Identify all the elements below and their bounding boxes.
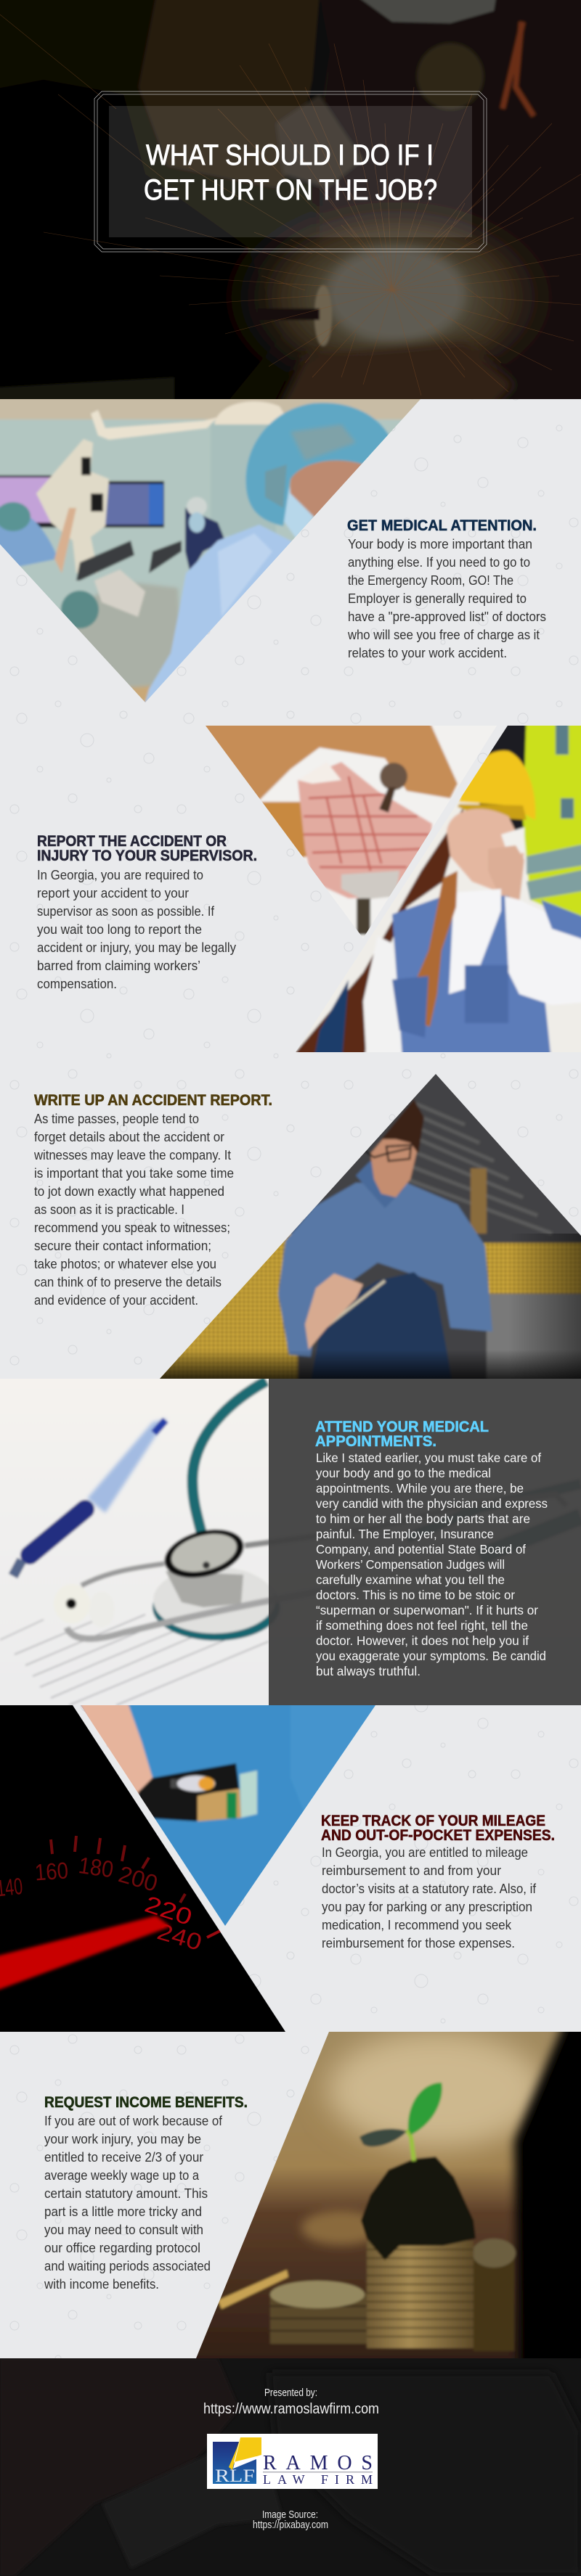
heading (315, 1419, 489, 1450)
photo: bandaged hand with nail (206, 726, 497, 936)
body text (316, 1451, 548, 1678)
presented by (203, 2387, 379, 2417)
body text: doctor’s visits at a statutory rate. Also, if (322, 1882, 537, 1896)
body text (33, 1112, 234, 1308)
body text: part is a little more tricky and (44, 2204, 202, 2219)
body text: anything else. If you need to go to (348, 555, 530, 570)
body text: you wait too long to report the (37, 922, 202, 937)
heading: ATTEND YOUR MEDICAL (315, 1419, 489, 1435)
hero photo: welder grinding with sparks (0, 0, 581, 414)
photo: wallet in shirt pocket (81, 1705, 375, 1926)
body text: Your body is more important than (348, 537, 532, 551)
body text: the Emergency Room, GO! The (348, 573, 513, 588)
photo: speedometer (0, 1705, 290, 2032)
panel: request income benefits (44, 2017, 581, 2373)
body text: and waiting periods associated (44, 2259, 211, 2273)
body text: In Georgia, you are entitled to mileage (322, 1845, 528, 1860)
logo: Ramos Law Firm: RAMOS (263, 2452, 373, 2474)
photo: seedling on stack of coins (189, 2017, 581, 2373)
body text: medication, I recommend you seek (322, 1918, 512, 1932)
presented by: Presented by: (264, 2387, 317, 2399)
body text: but always truthful. (316, 1664, 420, 1678)
heading (37, 833, 257, 864)
body text: you exaggerate your symptoms. Be candid (316, 1649, 546, 1663)
body text: our office regarding protocol (44, 2241, 200, 2255)
body text: report your accident to your (37, 886, 189, 901)
body text: Workers’ Compensation Judges will (316, 1557, 505, 1572)
body text: very candid with the physician and express (316, 1496, 548, 1511)
photo: speedometer: 200 (115, 1861, 161, 1897)
photo: speedometer: 160 (34, 1857, 69, 1885)
body text: carefully examine what you tell the (316, 1572, 505, 1587)
body text: “superman or superwoman". If it hurts or (316, 1603, 538, 1617)
body text: can think of to preserve the details (34, 1275, 222, 1289)
body text: take photos; or whatever else you (34, 1257, 216, 1271)
panel: keep track of mileage (0, 1691, 555, 2032)
body text: barred from claiming workers’ (37, 959, 200, 973)
heading: GET MEDICAL ATTENTION. (347, 517, 537, 534)
photo: speedometer: 220 (142, 1891, 195, 1930)
body text: average weekly wage up to a (44, 2168, 200, 2183)
body text: as soon as it is practicable. I (34, 1202, 184, 1217)
heading: INJURY TO YOUR SUPERVISOR. (37, 848, 257, 864)
body text: witnesses may leave the company. It (33, 1148, 231, 1162)
photo: stethoscope and pen on paperwork (0, 1364, 581, 1720)
website url: https://www.ramoslawfirm.com (203, 2401, 379, 2417)
body text: who will see you free of charge as it (347, 628, 540, 642)
logo: Ramos Law Firm: LAW FIRM (263, 2472, 373, 2487)
body text: doctor. However, it does not help you if (316, 1633, 529, 1648)
body text: Employer is generally required to (348, 591, 527, 606)
body text: to him or her all the body parts that are (316, 1511, 530, 1526)
body text: reimbursement for those expenses. (322, 1936, 515, 1951)
body text: reimbursement to and from your (322, 1863, 501, 1878)
photo: man writing in notebook on sofa (145, 1067, 581, 1393)
heading: REPORT THE ACCIDENT OR (37, 833, 227, 850)
body text (44, 2114, 223, 2292)
photo: speedometer: 240 (155, 1918, 205, 1956)
photo: nurse in operating room (0, 399, 420, 702)
image source credit (253, 2509, 328, 2531)
body text: you pay for parking or any prescription (322, 1900, 532, 1914)
heading: AND OUT-OF-POCKET EXPENSES. (321, 1827, 555, 1844)
title: WHAT SHOULD I DO IF I (146, 139, 434, 171)
body text: appointments. While you are there, be (316, 1481, 524, 1496)
title: GET HURT ON THE JOB? (144, 174, 437, 206)
logo: Ramos Law Firm (207, 2434, 378, 2489)
body text: your body and go to the medical (316, 1466, 491, 1480)
panel: hero header (0, 0, 581, 414)
body text: doctors. This is no time to be stoic or (316, 1588, 515, 1602)
heading: REQUEST INCOME BENEFITS. (44, 2094, 248, 2111)
panel: get medical attention (0, 385, 546, 715)
title (144, 139, 437, 206)
footer dark photo background (0, 2358, 581, 2576)
body text: if something does not feel right, tell the (316, 1618, 528, 1633)
body text (37, 868, 236, 991)
body text: with income benefits. (44, 2277, 159, 2292)
dark text overlay (269, 1379, 581, 1705)
double line frame (94, 91, 487, 252)
body text: is important that you take some time (34, 1166, 234, 1181)
body text: secure their contact information; (34, 1239, 211, 1253)
panel: attend your medical appointments (0, 1364, 581, 1720)
panel: write up an accident report (33, 1067, 581, 1393)
body text: and evidence of your accident. (34, 1293, 198, 1308)
body text: If you are out of work because of (44, 2114, 223, 2128)
body text: painful. The Employer, Insurance (316, 1527, 494, 1541)
heading: KEEP TRACK OF YOUR MILEAGE (321, 1813, 545, 1829)
body text: As time passes, people tend to (34, 1112, 199, 1126)
body text: compensation. (37, 977, 117, 991)
heading (321, 1813, 555, 1844)
photo: worker on phone wearing hard hat (296, 726, 581, 1052)
body text: certain statutory amount. This (44, 2186, 208, 2201)
body text: Like I stated earlier, you must take care of (316, 1451, 541, 1465)
body text: to jot down exactly what happened (34, 1184, 224, 1199)
body text: have a "pre-approved list" of doctors (348, 610, 546, 624)
logo: Ramos Law Firm: RLF (215, 2466, 255, 2486)
body text (347, 537, 546, 660)
image source credit: https://pixabay.com (253, 2519, 328, 2531)
image source credit: Image Source: (262, 2509, 318, 2521)
body text: entitled to receive 2/3 of your (44, 2150, 203, 2165)
body text: In Georgia, you are required to (37, 868, 203, 882)
heading: WRITE UP AN ACCIDENT REPORT. (34, 1092, 272, 1109)
panel: report the accident (37, 711, 581, 1067)
body text: supervisor as soon as possible. If (37, 904, 215, 919)
body text (322, 1845, 537, 1951)
body text: forget details about the accident or (34, 1130, 224, 1144)
body text: relates to your work accident. (348, 646, 507, 660)
title box panel (109, 106, 472, 237)
light droplet background (0, 399, 581, 2358)
body text: recommend you speak to witnesses; (34, 1221, 230, 1235)
heading: APPOINTMENTS. (315, 1433, 436, 1450)
body text: accident or injury, you may be legally (37, 940, 236, 955)
panel: footer (0, 2358, 581, 2576)
photo: speedometer: 180 (77, 1852, 115, 1882)
body text: Company, and potential State Board of (316, 1542, 526, 1556)
body text: you may need to consult with (44, 2223, 203, 2237)
body text: your work injury, you may be (44, 2132, 201, 2146)
